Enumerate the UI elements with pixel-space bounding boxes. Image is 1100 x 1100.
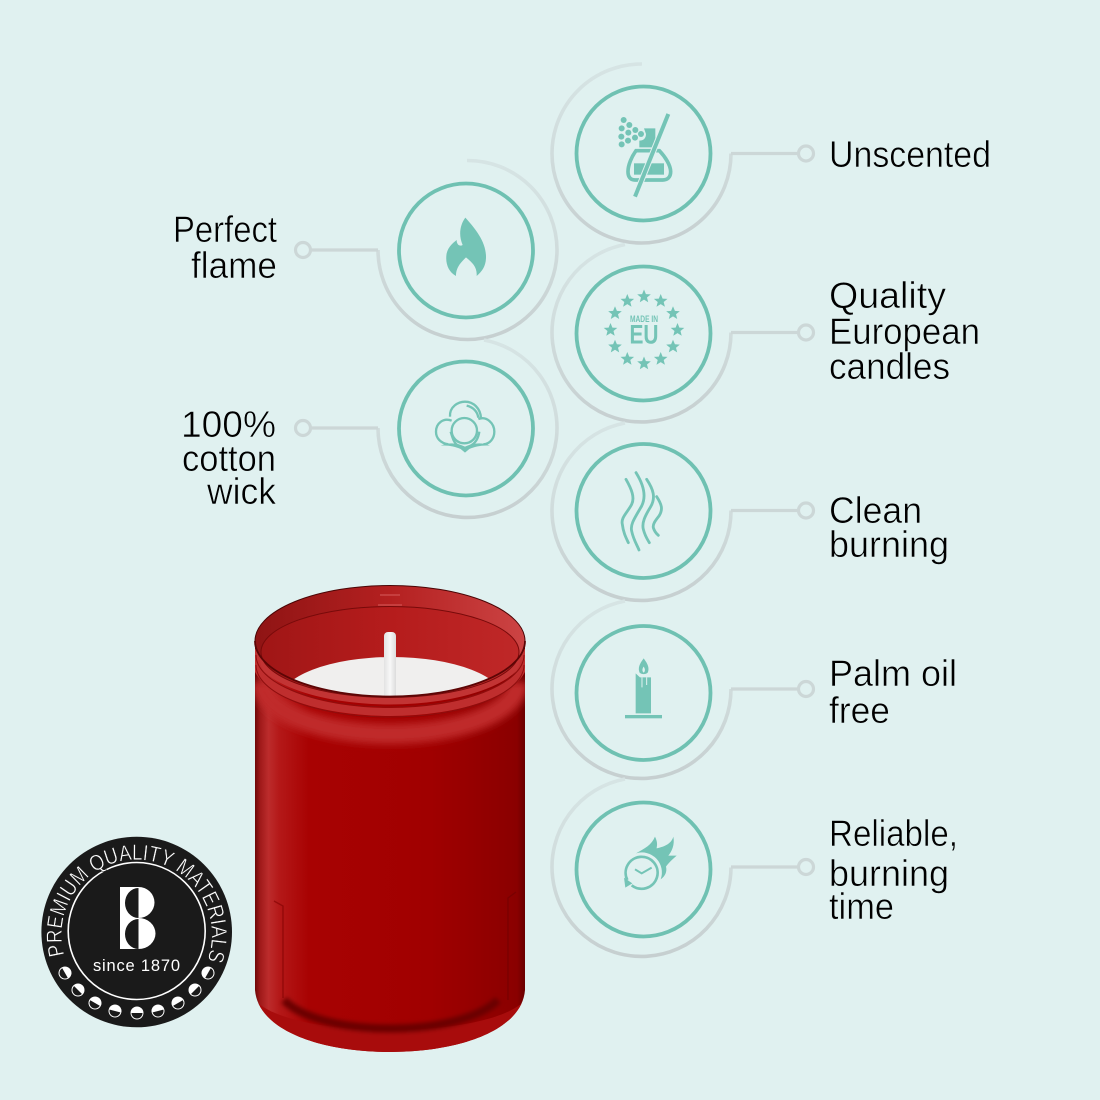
label: 100% cotton wick: cotton (182, 438, 276, 479)
candle rim opening (255, 586, 525, 696)
inner glass (261, 606, 519, 698)
connector: burning time (731, 860, 814, 874)
label: Clean burning: burning (829, 524, 949, 565)
connector: palm oil (731, 682, 814, 696)
badge dots (57, 965, 216, 1019)
ring: flame (399, 184, 533, 318)
connector: cotton (296, 420, 378, 436)
label: Clean burning (829, 490, 949, 565)
label: Palm oil free (829, 653, 957, 731)
icon: cotton boll (436, 402, 494, 453)
label: 100% cotton wick: wick (206, 471, 276, 512)
badge (41, 836, 232, 1028)
label: Reliable burning time: Reliable, (829, 813, 958, 854)
label: 100% cotton wick (181, 404, 276, 512)
label: Quality European candles: candles (829, 346, 950, 387)
label: Unscented: Unscented (829, 134, 991, 175)
ring: cotton (399, 362, 533, 496)
label: Quality European candles: Quality (829, 275, 947, 316)
ring: made in EU (576, 266, 710, 400)
badge since 1870: since 1870 (93, 957, 180, 975)
badge inner ring (68, 862, 205, 1000)
candle body (255, 640, 525, 1052)
candle (255, 586, 525, 1060)
connector: unscented (731, 146, 814, 161)
ring: clean burning (576, 444, 710, 578)
label: Perfect flame: Perfect (173, 209, 278, 250)
feature: Quality European candles (552, 244, 980, 422)
wax and wick (294, 632, 488, 696)
label: Perfect flame: flame (191, 245, 277, 286)
feature: Clean burning (552, 423, 949, 600)
feature: Perfect flame (173, 160, 557, 339)
icon: made in EU stars: EU (630, 320, 658, 350)
label: Quality European candles (829, 275, 980, 387)
candle body details (255, 649, 525, 1060)
label: Quality European candles: European (829, 311, 980, 352)
connector: flame (296, 242, 378, 258)
label: Palm oil free: free (829, 690, 890, 731)
badge circular text: PREMIUM QUALITY MATERIALS (46, 844, 227, 962)
icon: made in EU stars (604, 290, 684, 369)
label: Perfect flame (173, 209, 278, 286)
ring: unscented (576, 86, 710, 220)
label: Reliable burning time (829, 813, 958, 927)
badge logo B (120, 887, 156, 949)
feature: Palm oil free (552, 601, 957, 778)
icon: candle (625, 658, 662, 718)
icon: flame (446, 218, 486, 276)
label: Clean burning: Clean (829, 490, 922, 531)
label: Palm oil free: Palm oil (829, 653, 957, 694)
icon: clock with flames (624, 837, 677, 889)
label: Reliable burning time: burning (829, 853, 949, 894)
connector: clean burning (731, 503, 814, 518)
feature: Unscented (552, 64, 991, 243)
label: Reliable burning time: time (829, 886, 894, 927)
feature: Reliable burning time (552, 779, 958, 956)
icon: perfume bottle crossed out (618, 114, 671, 197)
ring: palm oil free (576, 626, 710, 760)
feature: 100% cotton wick (181, 340, 557, 517)
ring: burning time (576, 802, 710, 936)
connector: EU (731, 325, 814, 340)
icon: smoke waves (622, 473, 661, 550)
icon: made in EU stars: MADE IN (630, 314, 658, 325)
label: 100% cotton wick: 100% (181, 404, 276, 445)
